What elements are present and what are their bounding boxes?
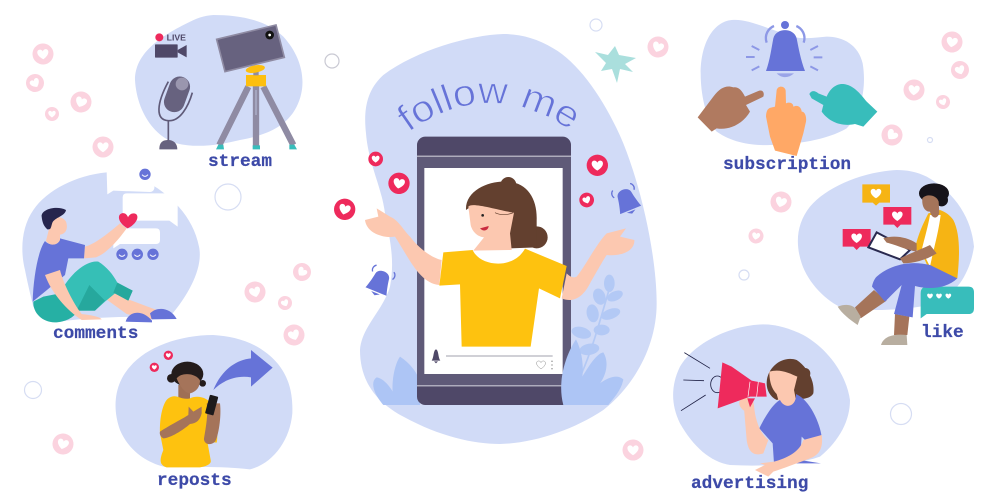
figure: woman xyxy=(365,177,634,347)
chat bubble seat xyxy=(921,287,974,318)
panel: advertising xyxy=(673,324,850,477)
megaphone sound lines xyxy=(681,353,710,411)
icon: repost arrow xyxy=(213,350,273,390)
figure: woman with megaphone xyxy=(739,359,822,477)
icon: orange hand xyxy=(766,87,806,156)
decorative outlined circles xyxy=(24,19,932,424)
panel: reposts xyxy=(116,335,292,469)
icon: smileys xyxy=(116,169,159,260)
icon: tripod with phone xyxy=(216,25,297,149)
figure: sitting man xyxy=(33,208,177,322)
icon: small hearts xyxy=(150,351,173,372)
subscription background blob xyxy=(701,20,864,145)
heading: follow me: follow me xyxy=(398,84,576,130)
icon: live camera xyxy=(155,33,187,58)
post controls xyxy=(432,349,553,369)
icon: teal hand xyxy=(809,84,877,127)
icon: bell xyxy=(746,21,822,77)
icon: floating hearts xyxy=(332,152,608,222)
heading: stream: stream xyxy=(208,152,272,172)
plant: right xyxy=(561,275,625,405)
reposts background blob xyxy=(116,335,292,469)
icon: microphone xyxy=(159,74,193,149)
panel: subscription xyxy=(698,20,877,156)
speech bubbles xyxy=(107,170,178,248)
heading: advertising: advertising xyxy=(691,474,808,494)
panel: comments xyxy=(22,169,200,322)
panel: stream xyxy=(135,15,302,149)
plant: left xyxy=(373,357,420,405)
panel: like xyxy=(798,170,974,345)
comments background blob xyxy=(22,172,200,322)
heading: reposts: reposts xyxy=(157,471,232,491)
icon: bell right xyxy=(611,183,643,218)
main background blob xyxy=(360,34,657,444)
icon: bell left xyxy=(364,264,396,300)
phone body xyxy=(417,137,571,405)
figure: man with tablet xyxy=(838,183,959,345)
panel: follow me phone xyxy=(334,34,657,444)
icon: brown hand xyxy=(698,86,764,132)
icon: live camera: LIVE xyxy=(167,33,186,43)
heading: comments: comments xyxy=(53,324,138,344)
icon: red heart xyxy=(119,213,137,228)
icon: teal star xyxy=(595,46,636,83)
figure: woman with phone xyxy=(160,362,220,467)
stream background blob xyxy=(135,15,302,146)
advertising background blob xyxy=(673,324,850,466)
icon: megaphone xyxy=(711,362,767,408)
heading: subscription: subscription xyxy=(723,155,851,175)
heading: like: like xyxy=(921,323,964,343)
like background blob xyxy=(798,170,974,310)
speech bubbles with hearts xyxy=(843,184,911,250)
